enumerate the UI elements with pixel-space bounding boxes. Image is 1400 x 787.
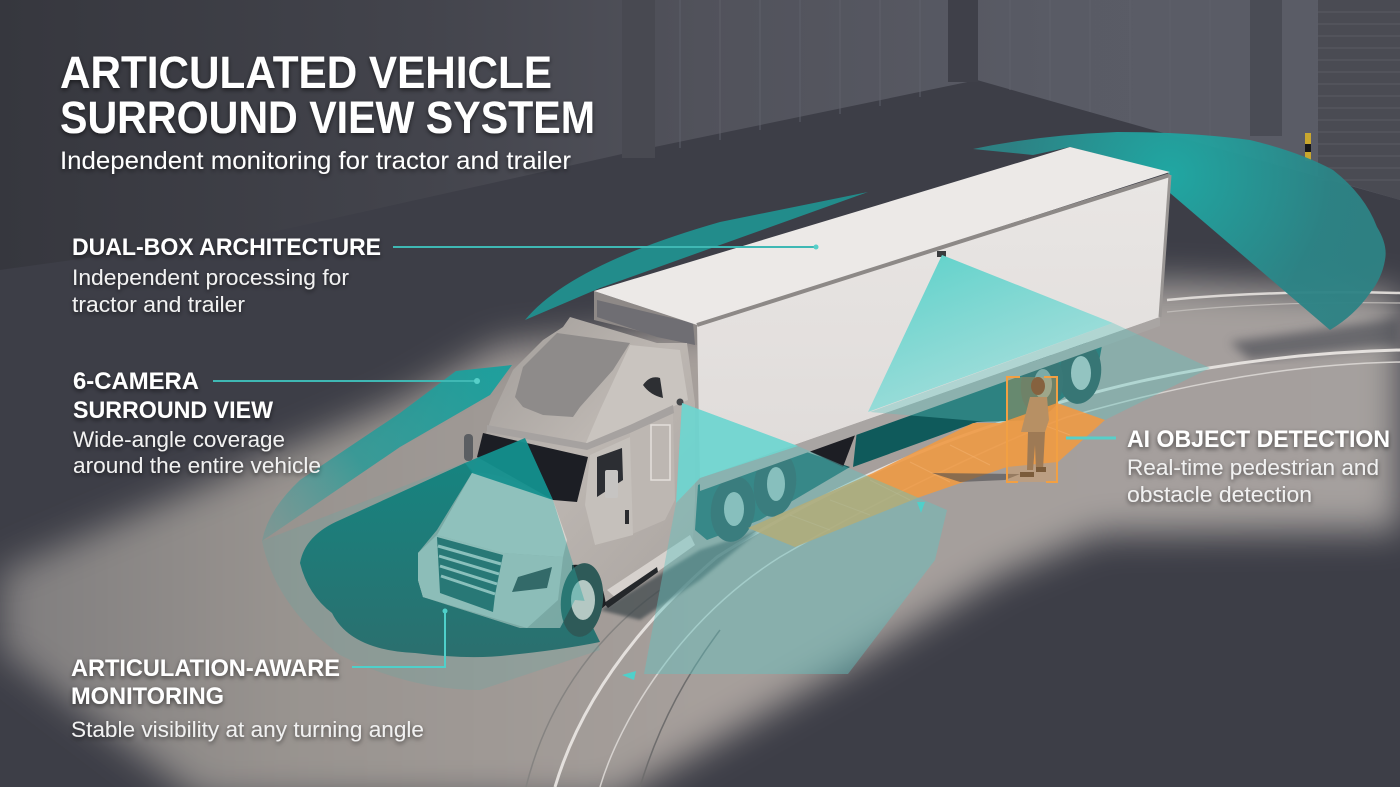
sleeper hatch	[651, 425, 670, 480]
hood	[437, 473, 567, 557]
callout: 6-camera surround view: 6-CAMERA	[73, 368, 199, 395]
coverage zone: left trailer sector	[525, 192, 868, 320]
fairing gap	[597, 300, 695, 345]
trailer rear edge	[1160, 175, 1170, 317]
callout: 6-camera surround view: SURROUND VIEW	[73, 397, 273, 424]
leader line: AI detection	[1066, 436, 1116, 440]
title: ARTICULATED VEHICLE	[60, 47, 552, 98]
callout: articulation-aware monitoring: Stable visibility at any turning angle	[71, 717, 424, 742]
orange detection zone	[748, 403, 1105, 547]
visor band	[487, 405, 674, 450]
trailer undercarriage	[853, 320, 1155, 467]
callout: dual-box architecture: DUAL-BOX ARCHITECTURE	[72, 234, 381, 261]
cab body	[418, 317, 695, 628]
wheel arch	[572, 565, 606, 610]
trailer camera	[937, 251, 946, 257]
leader line: dual-box	[393, 244, 818, 250]
callout: AI object detection: Real-time pedestrian and	[1127, 455, 1379, 480]
subtitle: Independent monitoring for tractor and trailer	[60, 147, 571, 175]
coverage zone: rear right sector	[973, 132, 1386, 330]
marker: zone tip	[917, 502, 925, 513]
cab sleeper panel	[630, 413, 675, 535]
callout: dual-box architecture: tractor and trailer	[72, 292, 246, 317]
leader line: 6-camera	[213, 378, 480, 384]
callout: 6-camera surround view: around the entire vehicle	[73, 453, 321, 478]
headlight	[512, 567, 552, 592]
detection bracket	[1007, 377, 1057, 482]
title	[60, 47, 595, 175]
callout: articulation-aware monitoring: MONITORING	[71, 683, 224, 710]
truck	[418, 147, 1170, 639]
coverage zone: front camera tint on cab	[418, 452, 585, 628]
tractor wheels	[707, 448, 800, 545]
callout: dual-box architecture	[72, 234, 381, 317]
floor shadow along tractor	[600, 530, 760, 620]
front wheel	[557, 561, 607, 639]
trailer roof rail	[697, 175, 1170, 325]
trailer roof	[594, 147, 1170, 325]
callout: AI object detection: obstacle detection	[1127, 482, 1312, 507]
coverage zone: trailer side camera	[868, 255, 1210, 423]
trailer bottom rail	[700, 317, 1160, 491]
tractor chassis	[695, 448, 850, 540]
callout: 6-camera surround view: Wide-angle coverage	[73, 427, 285, 452]
door handle	[625, 510, 629, 524]
landing gear	[800, 430, 857, 467]
cab step	[607, 535, 695, 600]
cab roof panel	[515, 333, 630, 417]
cab camera	[676, 398, 684, 406]
coverage zone: tractor side camera on trailer	[676, 403, 798, 503]
coverage zone: left cab band	[262, 365, 512, 541]
grille	[437, 537, 503, 612]
cab upper highlight	[585, 345, 688, 445]
trailer side	[697, 175, 1170, 478]
coverage zone: pale front lobe	[262, 439, 600, 690]
leader line: articulation	[352, 608, 448, 667]
floor turning-path curves	[526, 292, 1400, 787]
right mirror	[605, 470, 618, 498]
callout: dual-box architecture: Independent processing for	[72, 265, 350, 290]
callout: articulation-aware monitoring	[71, 655, 424, 742]
marker: side path	[622, 671, 636, 680]
shade band right	[1230, 318, 1400, 360]
title: SURROUND VIEW SYSTEM	[60, 92, 595, 143]
cab skirt shadow	[604, 567, 658, 608]
fender and bumper	[418, 535, 563, 628]
callout: AI object detection	[1127, 426, 1390, 507]
sleeper vent	[643, 377, 663, 398]
trailer front face	[594, 291, 697, 345]
door	[585, 437, 633, 545]
door window	[597, 448, 623, 497]
callout: 6-camera surround view	[73, 368, 321, 478]
yellow post	[1305, 133, 1311, 161]
lit floor patch	[0, 282, 1400, 787]
windshield	[477, 433, 588, 502]
trailer wheels	[1017, 339, 1105, 418]
coverage zone: tractor side camera on floor	[644, 403, 947, 674]
callout: AI object detection: AI OBJECT DETECTION	[1127, 426, 1390, 453]
pedestrian	[932, 377, 1049, 482]
left mirror	[464, 434, 473, 461]
coverage zone: front camera on windshield	[465, 438, 553, 500]
coverage zone: truck shadow in teal	[300, 463, 600, 657]
callout: articulation-aware monitoring: ARTICULATION-AWARE	[71, 655, 340, 682]
